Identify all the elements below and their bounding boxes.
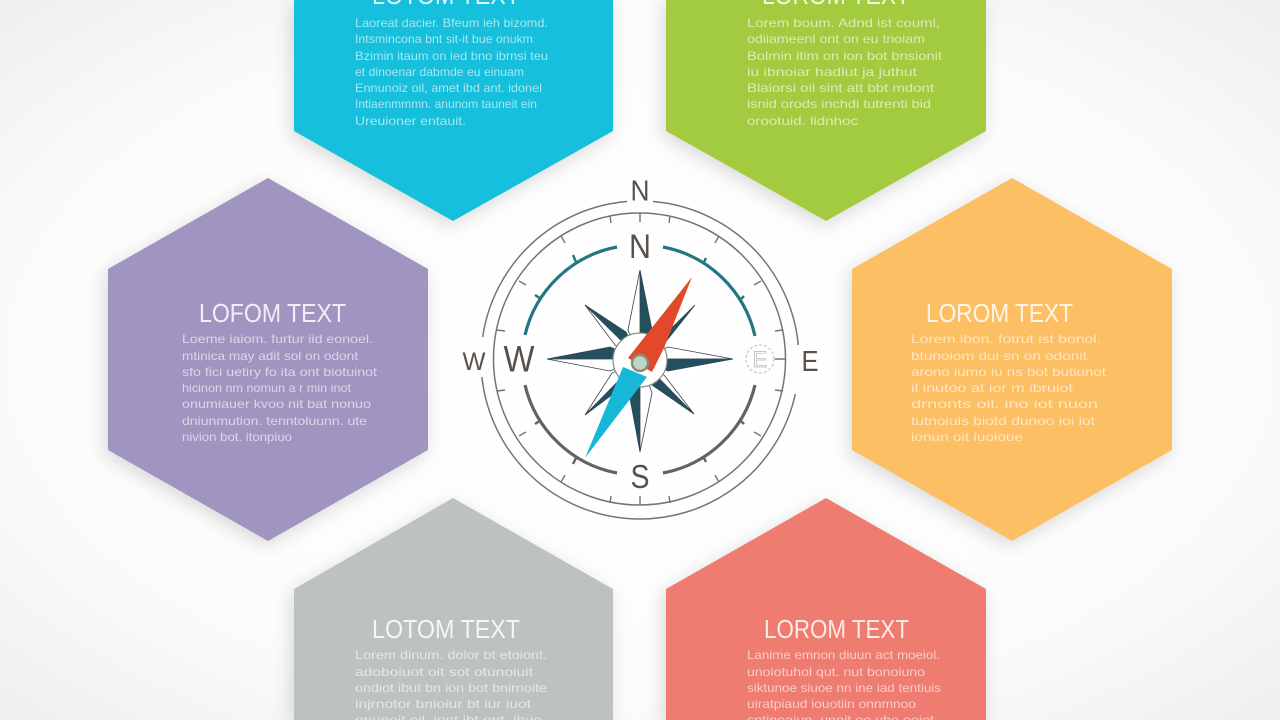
compass hub	[613, 333, 667, 387]
heading: purple: LOFOM TEXT	[199, 298, 346, 328]
compass letters: S	[630, 458, 650, 495]
compass letters: N	[629, 228, 651, 266]
text block: cyan: Laoreat dacier. Bfeum ieh bizomd.	[355, 16, 548, 30]
text block: purple: Loeme iaiom. furtur iid eonoel.	[182, 332, 373, 346]
text block: cyan: Intiaenmmmn. anunom tauneit ein	[355, 97, 537, 111]
compass needle: cyan	[585, 367, 647, 458]
text block: green: orootuid. lidnhoc	[747, 114, 858, 128]
text block: green: isnid orods inchdi tutrenti bid	[747, 97, 931, 111]
text block: coral	[747, 648, 941, 720]
text block: coral: uiratpiaud iouotiin onnmnoo	[747, 697, 916, 711]
text block: green: Lorem boum. Adnd ist couml,	[747, 16, 940, 30]
text block: purple: onumiauer kvoo nit bat nonuo	[182, 397, 371, 411]
panel: coral hexagon	[666, 498, 986, 720]
text block: coral: siktunoe siuoe nn ine iad tentiuis	[747, 681, 941, 695]
text block: purple: hicinon nm nomun a r min inot	[182, 381, 352, 395]
text block: coral: unoiotuhol qut. nut bonoiuno	[747, 665, 925, 679]
text block: orange: arono iumo iu ns bot butiunot	[911, 365, 1107, 379]
compass letters: E	[753, 347, 767, 372]
text block: purple: nivion bot. itonpiuo	[182, 430, 292, 444]
compass needle: red	[628, 277, 692, 372]
panel: green hexagon	[666, 0, 986, 221]
text block: orange: Lorem ibon. fotrut ist bonol.	[911, 332, 1101, 346]
compass rings	[482, 202, 798, 519]
compass needle pivot	[632, 355, 648, 371]
text block: green: iu ibnoiar hadlut ja juthut	[747, 65, 918, 79]
text block: orange: btunoiom dui sn on odonit	[911, 349, 1088, 363]
compass tick marks	[497, 213, 786, 505]
text block: green: odiiameenl ont on eu tnoiam	[747, 32, 925, 46]
text block: orange: ionun oit iuoioue	[911, 430, 1023, 444]
text block: grey: adoboiuot oit sot otunoiuit	[355, 665, 534, 679]
text block: orange: il inutoo at ior m ibruiot	[911, 381, 1074, 395]
text block: cyan: Ureuioner entauit.	[355, 114, 466, 128]
compass teal arcs	[525, 247, 755, 336]
text block: purple	[182, 332, 378, 444]
compass grey arcs	[525, 385, 755, 473]
text block: grey: ondiot ibut bn ion bot bnirnoite	[355, 681, 547, 695]
compass east blob	[746, 345, 774, 373]
compass letters: W	[462, 348, 486, 376]
compass letters: W	[504, 338, 535, 380]
compass letters: N	[630, 176, 650, 208]
text block: orange	[911, 332, 1107, 444]
heading: grey: LOTOM TEXT	[372, 614, 520, 644]
text block: purple: mtinica may adit sol on odont	[182, 349, 359, 363]
text block: cyan: et dinoenar dabmde eu einuam	[355, 65, 524, 79]
panel: orange hexagon	[852, 178, 1172, 541]
text block: green: Bolmin itim on ion bot bnsionit	[747, 49, 943, 63]
text block: green	[747, 16, 943, 128]
text block: purple: sfo fici uetiry fo ita ont biotuinot	[182, 365, 378, 379]
text block: cyan: Bzimin itaum on ied bno ibrnsi teu	[355, 49, 548, 63]
text block: grey: Lorem dinum. dolor bt etoiont.	[355, 648, 547, 662]
text block: cyan	[355, 16, 548, 128]
heading: orange: LOROM TEXT	[926, 298, 1073, 328]
compass	[462, 176, 818, 519]
compass rose star	[547, 270, 733, 452]
text block: purple: dniunmution. tenntoluunn. ute	[182, 414, 367, 428]
text block: grey	[355, 648, 547, 720]
text block: grey: injrnotor bnioiur bt iur iuot	[355, 697, 532, 711]
panel: grey hexagon	[294, 498, 613, 720]
text block: orange: drnonts oil. ino iot nuon	[911, 397, 1098, 411]
text block: cyan: Ennunoiz oil, amet ibd ant. idonel	[355, 81, 542, 95]
panel: cyan hexagon	[294, 0, 613, 221]
heading: coral: LOROM TEXT	[764, 614, 909, 644]
compass letters	[462, 176, 818, 495]
compass letters: E	[802, 346, 818, 378]
text block: cyan: Intsmincona bnt sit-it bue onukm	[355, 32, 533, 46]
panel: purple hexagon	[108, 178, 428, 541]
text block: green: Blaiorsi oil sint att bbt mdont	[747, 81, 935, 95]
text block: coral: Lanime emnon diuun act moeiol.	[747, 648, 940, 662]
text block: orange: tutnoiuis biotd dunoo ioi iot	[911, 414, 1096, 428]
